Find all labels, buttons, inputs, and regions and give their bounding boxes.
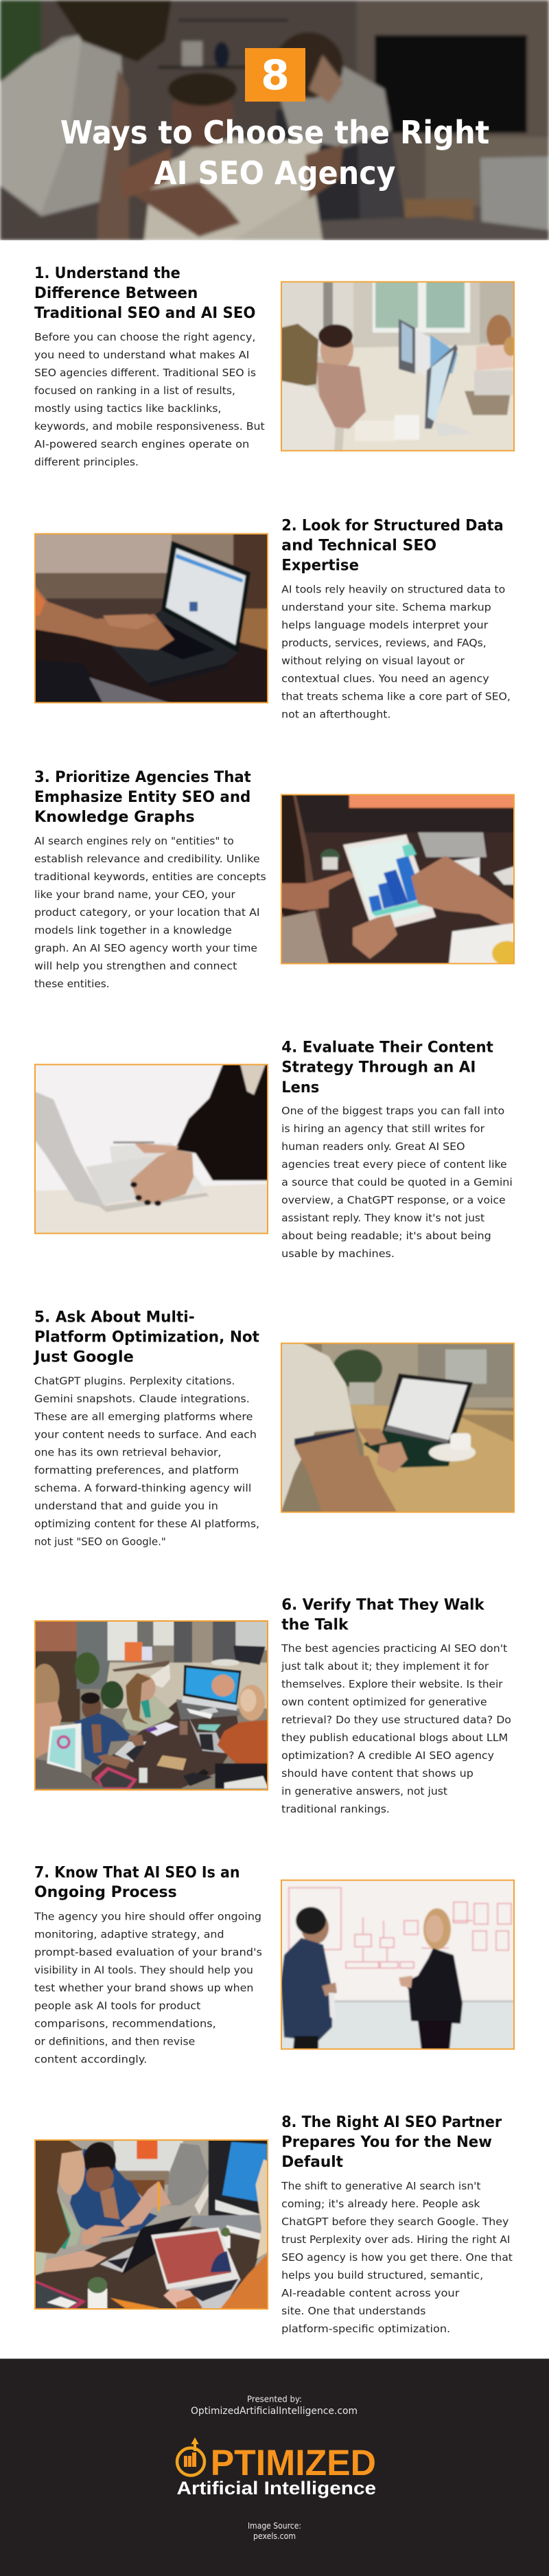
number badge: 8 xyxy=(261,51,290,100)
heading: tip 8 xyxy=(281,2114,502,2171)
body text: tip 8: The shift to generative AI search isn't xyxy=(281,2180,481,2192)
body text: tip 5: not just "SEO on Google." xyxy=(34,1535,166,1548)
presented by text xyxy=(191,2395,358,2417)
body text: tip 6: in generative answers, not just xyxy=(281,1785,447,1797)
heading: tip 3: Knowledge Graphs xyxy=(34,809,195,826)
body text: tip 4: overview, a ChatGPT response, or a voice xyxy=(281,1194,506,1206)
body text: tip 3 xyxy=(34,835,266,990)
body text: tip 3: these entities. xyxy=(34,978,110,990)
body text: tip 1: focused on ranking in a list of results, xyxy=(34,384,235,397)
body text: tip 2: AI tools rely heavily on structured data to xyxy=(281,583,505,595)
body text: tip 5: schema. A forward-thinking agency will xyxy=(34,1482,251,1494)
body text: tip 5 xyxy=(34,1375,259,1548)
photo: colleagues at laptops close-up xyxy=(33,2136,272,2313)
body text: tip 5: one has its own retrieval behavior, xyxy=(34,1446,221,1458)
body text: tip 1: AI-powered search engines operate on xyxy=(34,438,249,450)
body text: tip 7: content accordingly. xyxy=(34,2054,147,2066)
body text: tip 3: like your brand name, your CEO, your xyxy=(34,888,236,901)
heading: tip 7: 7. Know That AI SEO Is an xyxy=(34,1864,240,1881)
body text: tip 2: without relying on visual layout or xyxy=(281,654,465,667)
photo: woman typing on silver laptop xyxy=(34,1064,268,1234)
body text: tip 6: optimization? A credible AI SEO agency xyxy=(281,1749,494,1762)
body text: tip 3: traditional keywords, entities are concepts xyxy=(34,871,266,883)
heading: tip 5: Just Google xyxy=(33,1349,134,1366)
body text: tip 3: AI search engines rely on "entities" to xyxy=(34,835,234,847)
body text: tip 2: that treats schema like a core part of SEO, xyxy=(281,690,511,702)
heading: tip 1: 1. Understand the xyxy=(34,265,180,282)
body text: tip 4: a source that could be quoted in a Gemini xyxy=(281,1176,513,1188)
heading: tip 1 xyxy=(34,265,255,322)
body text: tip 7: comparisons, recommendations, xyxy=(34,2018,216,2030)
wordmark: PTIMIZED xyxy=(211,2443,376,2483)
body text: tip 7: monitoring, adaptive strategy, and xyxy=(34,1929,224,1941)
body text: tip 4: assistant reply. They know it's not just xyxy=(281,1212,484,1224)
heading: tip 3: 3. Prioritize Agencies That xyxy=(34,769,251,786)
body text: tip 3: product category, or your location that AI xyxy=(34,906,260,919)
body text: tip 6: themselves. Explore their website. Is their xyxy=(281,1678,503,1690)
body text: tip 7: people ask AI tools for product xyxy=(34,2000,200,2012)
heading: tip 5 xyxy=(33,1309,259,1366)
photo: person using laptop showing Google xyxy=(281,1343,515,1513)
body text: tip 2: not an afterthought. xyxy=(281,708,390,720)
panel: tip 5 xyxy=(33,1309,515,1548)
body text: tip 3: models link together in a knowledge xyxy=(34,924,232,936)
heading: tip 2: Expertise xyxy=(281,557,359,575)
heading: tip 7 xyxy=(34,1864,240,1901)
body text: tip 8 xyxy=(281,2180,513,2335)
heading: tip 5: Platform Optimization, Not xyxy=(34,1329,259,1346)
heading: tip 7: Ongoing Process xyxy=(34,1884,177,1901)
footer xyxy=(0,2359,549,2576)
body text: tip 3: will help you strengthen and connect xyxy=(34,960,237,972)
body text: tip 1: Before you can choose the right agency, xyxy=(34,331,255,343)
body text: tip 7: visibility in AI tools. They should help you xyxy=(34,1964,253,1977)
body text: tip 2: contextual clues. You need an agency xyxy=(281,672,489,685)
panel: tip 2 xyxy=(34,517,511,720)
panel: tip 3 xyxy=(34,769,522,990)
body text: tip 5: your content needs to surface. And each xyxy=(34,1428,257,1440)
body text: tip 7: or definitions, and then revise xyxy=(34,2036,195,2048)
body text: tip 2: understand your site. Schema markup xyxy=(281,601,491,613)
body text: tip 8: coming; it's already here. People ask xyxy=(281,2198,480,2210)
heading: tip 2: and Technical SEO xyxy=(281,537,436,555)
body text: tip 4 xyxy=(281,1105,513,1260)
panel: tip 4 xyxy=(34,1039,513,1260)
body text: tip 1: mostly using tactics like backlinks, xyxy=(34,402,221,415)
header banner xyxy=(0,0,549,240)
photo: team around table with blue monitor xyxy=(30,1617,271,1792)
title: Ways to Choose the Right xyxy=(60,114,489,151)
body text: tip 2: products, services, reviews, and FAQs, xyxy=(281,636,487,649)
heading: tip 3 xyxy=(34,769,251,826)
body text: tip 5: These are all emerging platforms where xyxy=(34,1410,253,1423)
body text: tip 7: prompt-based evaluation of your brand's xyxy=(34,1946,262,1959)
photo: hands typing on laptop xyxy=(34,533,268,703)
body text: tip 5: formatting preferences, and platform xyxy=(34,1464,239,1476)
panel: tip 7 xyxy=(34,1864,515,2066)
body text: tip 8: AI-readable content across your xyxy=(281,2287,460,2299)
photo: tablet with blue bar chart xyxy=(281,794,522,965)
body text: tip 7: The agency you hire should offer ongoing xyxy=(34,1911,261,1923)
heading: tip 6: 6. Verify That They Walk xyxy=(281,1597,485,1613)
image source credit: pexels.com xyxy=(253,2531,296,2541)
title: AI SEO Agency xyxy=(154,154,396,192)
body text: tip 8: site. One that understands xyxy=(281,2305,426,2317)
panel: tip 6 xyxy=(30,1597,511,1815)
heading: tip 3: Emphasize Entity SEO and xyxy=(34,789,250,806)
body text: tip 8: SEO agency is how you get there. One that xyxy=(281,2251,513,2264)
image source credit: Image Source: xyxy=(248,2521,301,2531)
photo: two people at whiteboard xyxy=(281,1880,515,2050)
body text: tip 4: One of the biggest traps you can fall into xyxy=(281,1105,504,1117)
body text: tip 1: SEO agencies different. Traditional SEO is xyxy=(34,367,256,379)
heading: tip 8: Prepares You for the New xyxy=(281,2134,492,2151)
heading: tip 4: 4. Evaluate Their Content xyxy=(281,1039,493,1057)
heading: tip 2 xyxy=(281,517,504,575)
body text: tip 6 xyxy=(281,1642,511,1815)
body text: tip 6: just talk about it; they implement it for xyxy=(281,1660,489,1672)
body text: tip 5: Gemini snapshots. Claude integrations. xyxy=(34,1392,250,1405)
icon: ring with bar chart and arrow xyxy=(177,2437,205,2476)
body text: tip 3: graph. An AI SEO agency worth your time xyxy=(34,942,257,954)
panel: tip 1 xyxy=(34,265,517,468)
body text: tip 1: you need to understand what makes AI xyxy=(34,349,249,361)
panel: tip 8 xyxy=(33,2114,513,2335)
heading: tip 1: Difference Between xyxy=(34,285,198,302)
body text: tip 6: traditional rankings. xyxy=(281,1803,390,1815)
body text: tip 7: test whether your brand shows up when xyxy=(34,1982,253,1994)
presented by text: Presented by: xyxy=(247,2395,302,2404)
body text: tip 1: different principles. xyxy=(34,456,139,468)
presented by text: OptimizedArtificialIntelligence.com xyxy=(191,2406,358,2417)
body text: tip 3: establish relevance and credibility. Unlike xyxy=(34,853,260,865)
body text: tip 4: about being readable; it's about being xyxy=(281,1230,491,1242)
heading: tip 4 xyxy=(281,1039,493,1096)
tagline: Artificial Intelligence xyxy=(177,2478,376,2498)
heading: tip 1: Traditional SEO and AI SEO xyxy=(34,305,255,322)
body text: tip 2 xyxy=(281,583,511,720)
heading: tip 4: Strategy Through an AI xyxy=(281,1059,476,1077)
body text: tip 8: ChatGPT before they search Google. They xyxy=(281,2216,509,2228)
body text: tip 6: The best agencies practicing AI SEO don't xyxy=(281,1642,507,1655)
title xyxy=(60,114,489,192)
heading: tip 2: 2. Look for Structured Data xyxy=(281,517,504,534)
body text: tip 7 xyxy=(34,1911,262,2066)
logo: Optimized Artificial Intelligence xyxy=(177,2437,376,2498)
photo: office meeting with monitors xyxy=(281,281,517,452)
body text: tip 5: understand that and guide you in xyxy=(34,1499,218,1512)
body text: tip 4: human readers only. Great AI SEO xyxy=(281,1140,465,1153)
heading: tip 6: the Talk xyxy=(281,1616,349,1633)
body text: tip 8: helps you build structured, semantic, xyxy=(281,2269,483,2281)
body text: tip 2: helps language models interpret your xyxy=(281,619,489,631)
body text: tip 1: keywords, and mobile responsiveness. But xyxy=(34,420,265,433)
heading: tip 6 xyxy=(281,1597,485,1633)
body text: tip 4: is hiring an agency that still writes for xyxy=(281,1123,485,1135)
body text: tip 8: platform-specific optimization. xyxy=(281,2323,450,2335)
number badge xyxy=(245,48,305,102)
heading: tip 4: Lens xyxy=(281,1079,319,1096)
body text: tip 6: retrieval? Do they use structured data? Do xyxy=(281,1714,511,1726)
body text: tip 6: own content optimized for generative xyxy=(281,1696,487,1708)
body text: tip 6: should have content that shows up xyxy=(281,1767,474,1780)
body text: tip 8: trust Perplexity over ads. Hiring the right AI xyxy=(281,2233,510,2246)
body text: tip 4: usable by machines. xyxy=(281,1247,395,1260)
body text: tip 5: ChatGPT plugins. Perplexity citations. xyxy=(34,1375,235,1387)
heading: tip 5: 5. Ask About Multi- xyxy=(34,1309,195,1326)
body text: tip 1 xyxy=(34,331,265,468)
photo: team at desk, darkened xyxy=(0,0,549,240)
body text: tip 5: optimizing content for these AI platforms, xyxy=(34,1517,259,1530)
heading: tip 8: 8. The Right AI SEO Partner xyxy=(281,2114,502,2131)
body text: tip 4: agencies treat every piece of content like xyxy=(281,1158,507,1171)
heading: tip 8: Default xyxy=(281,2154,343,2171)
body text: tip 6: they publish educational blogs about LLM xyxy=(281,1732,508,1744)
image source credit xyxy=(248,2521,301,2541)
